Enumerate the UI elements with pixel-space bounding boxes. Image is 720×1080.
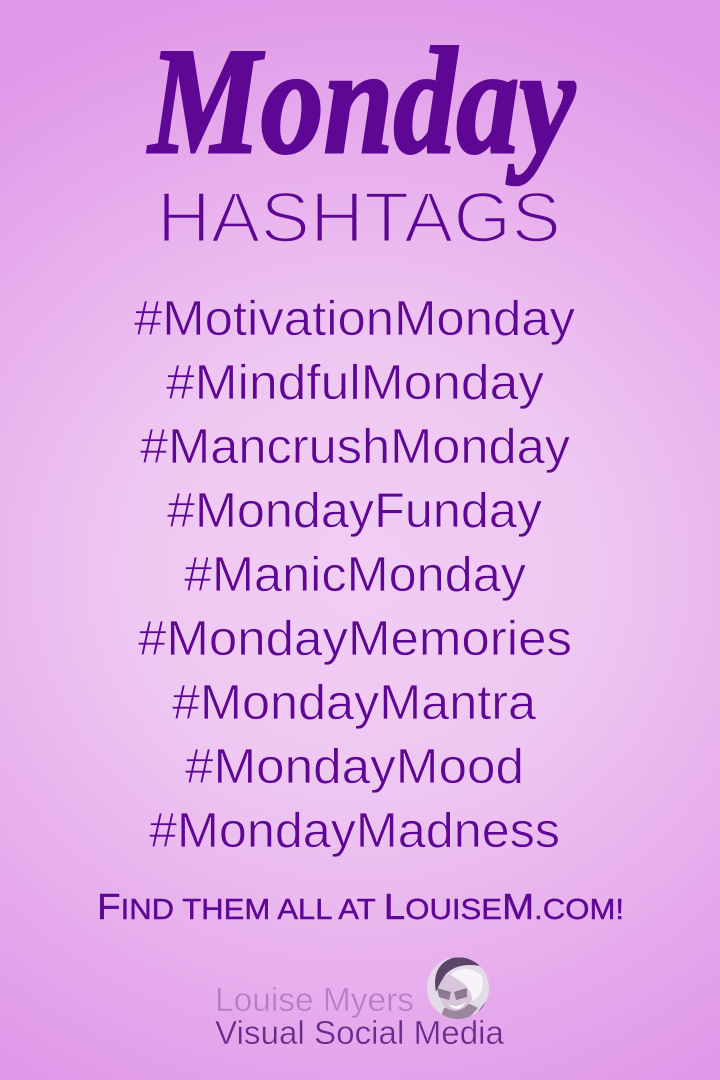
icon: author portrait bbox=[427, 957, 489, 1019]
title: Monday: Monday bbox=[147, 17, 575, 185]
hashtag 8: #MondayMood bbox=[185, 740, 524, 794]
hashtag 9: #MondayMadness bbox=[149, 804, 560, 858]
hashtag 7: #MondayMantra bbox=[172, 676, 537, 730]
hashtag list bbox=[134, 292, 576, 858]
brand tagline: Visual Social Media: Visual Social Media bbox=[215, 1014, 505, 1051]
hashtag 4: #MondayFunday bbox=[167, 484, 543, 538]
hashtag 3: #MancrushMonday bbox=[140, 420, 571, 474]
hashtag 6: #MondayMemories bbox=[138, 612, 572, 666]
brand name: Louise Myers: Louise Myers bbox=[215, 981, 414, 1018]
hashtag 2: #MindfulMonday bbox=[166, 356, 545, 410]
call to action: FIND THEM ALL AT LOUISEM.COM! bbox=[97, 886, 624, 927]
subtitle: HASHTAGS: HASHTAGS bbox=[157, 179, 561, 258]
hashtag 5: #ManicMonday bbox=[184, 548, 527, 602]
hashtag 1: #MotivationMonday bbox=[134, 292, 576, 346]
